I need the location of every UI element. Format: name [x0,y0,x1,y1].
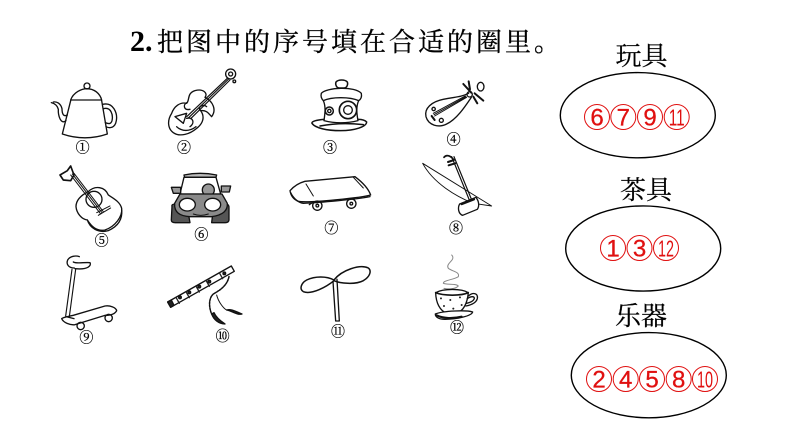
heading: tea sets: 茶具 [620,176,673,205]
icon: tea bowl with lid 3: ③ [323,137,337,157]
answers: toys: 11 [669,104,685,130]
panel: instruments ellipse [571,333,726,418]
icon: skateboard 7: ⑦ [324,218,338,238]
panel: toys ellipse [560,73,715,158]
answers: tea sets: 12 [658,236,674,262]
icon: bamboo dragonfly 11: ⑪ [331,322,345,342]
icon: erhu with bow 8 [423,156,492,238]
answers: tea sets: 1 [606,236,620,262]
icon: violin 2 [169,69,236,157]
answers: toys [584,104,689,132]
answers: tea sets: 3 [633,236,646,262]
icon: teapot 1: ① [76,137,90,157]
icon: erhu with bow 8: ⑧ [449,218,463,238]
icon: pipa 4: ④ [447,129,461,149]
heading: instruments: 乐器 [615,302,667,331]
icon: toy car 6: ⑥ [194,225,208,245]
icon: bamboo flute 10: ⑩ [216,326,230,346]
icon: toy car 6 [171,173,231,245]
panel: tea sets ellipse [566,206,721,291]
answers: instruments: 8 [672,366,685,394]
answers: instruments: 10 [697,366,713,392]
icon: pipa 4 [426,81,484,149]
icon: tea bowl with lid 3 [312,80,367,157]
icon: scooter 9: ⑨ [79,328,93,348]
icon: bamboo dragonfly 11 [301,267,370,342]
icon: scooter 9 [62,256,117,348]
answers: instruments: 4 [619,366,632,394]
answers: toys: 9 [643,104,657,132]
icon: steaming teacup 12 [435,255,477,338]
title: 把图中的序号填在合适的圈里。 [157,28,563,57]
title: 2. [130,25,152,58]
answers: instruments: 5 [645,366,659,394]
icon: skateboard 7 [290,177,371,238]
icon: violin 2: ② [177,137,191,157]
answers: toys: 7 [617,104,630,132]
icon: bamboo flute 10 [168,266,242,346]
answers: toys: 6 [590,104,604,132]
icon: steaming teacup 12: ⑫ [450,318,464,338]
answers: tea sets [600,236,678,262]
answers: instruments: 2 [592,366,606,394]
icon: guitar 5 [60,166,122,251]
heading: toys: 玩具 [615,42,668,71]
answers: instruments [586,366,718,394]
icon: teapot 1 [51,83,117,157]
icon: guitar 5: ⑤ [95,231,109,251]
